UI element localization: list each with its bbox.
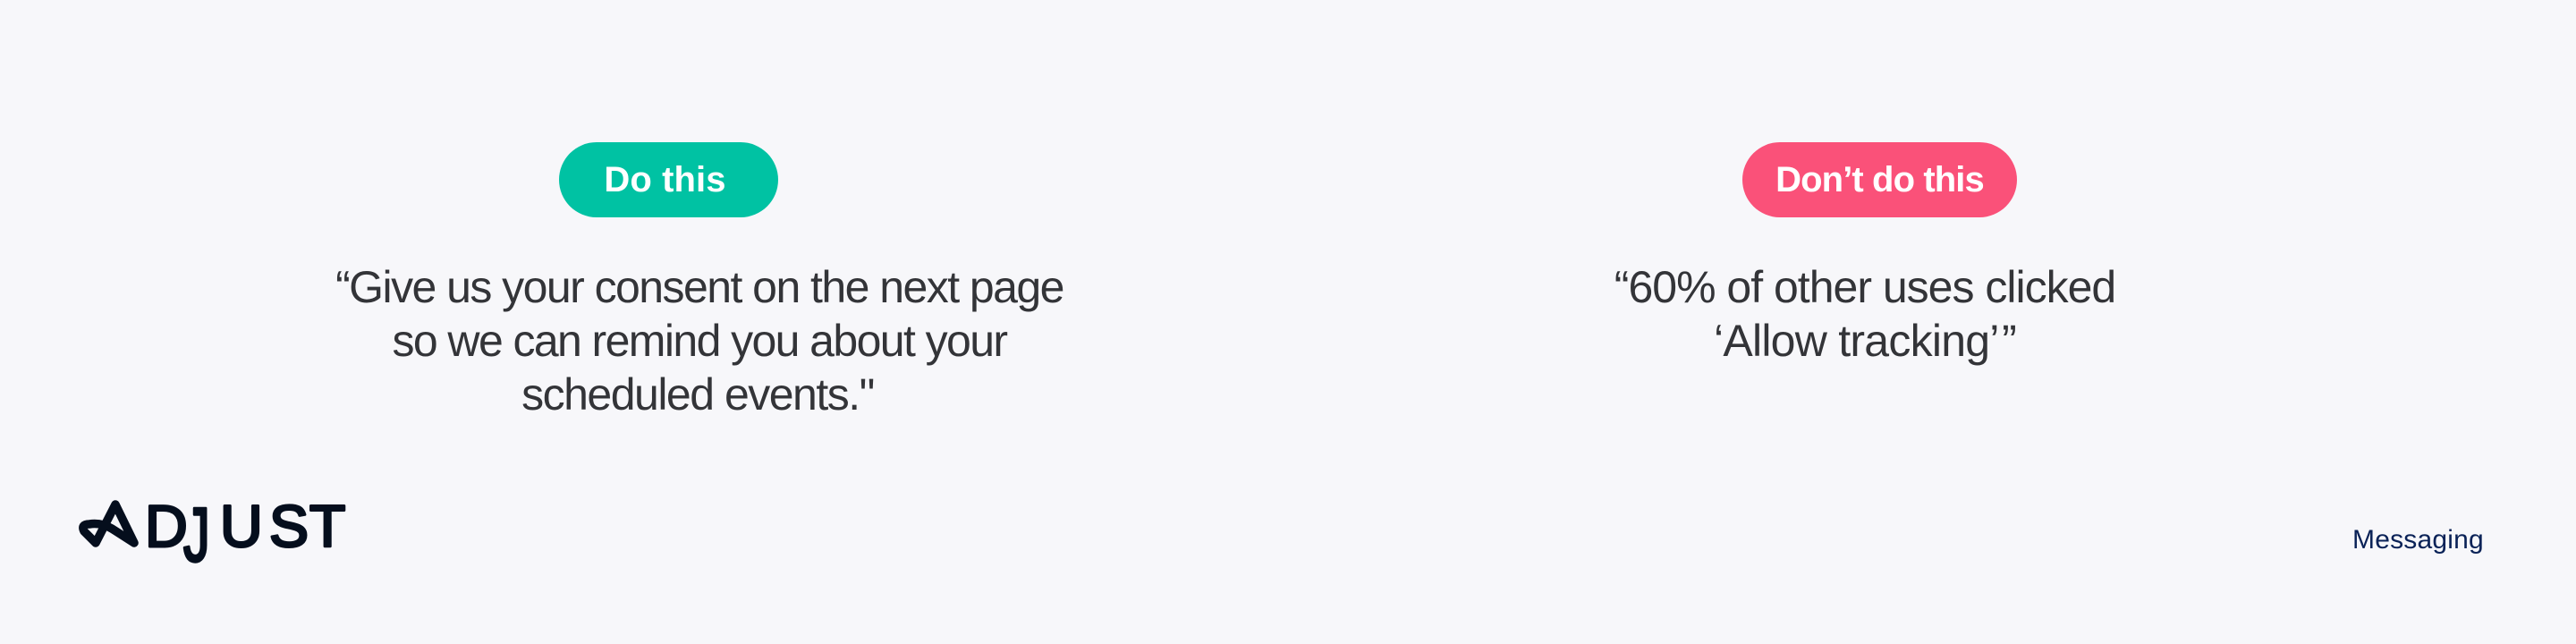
badge: don't do this	[1742, 142, 2017, 217]
badge: do this: Do this	[604, 160, 726, 199]
quote: recommended message: so we can remind you about your	[393, 316, 1006, 366]
wordmark letters: T	[309, 493, 345, 559]
wordmark letters: S	[269, 493, 309, 559]
logo: Adjust	[79, 492, 345, 572]
panel: don't do this	[1614, 142, 2115, 366]
quote: recommended message	[335, 262, 1063, 419]
quote: discouraged message	[1614, 262, 2115, 366]
wordmark letters: U	[220, 493, 263, 559]
panel: do this	[335, 142, 1063, 419]
wordmark letters	[145, 491, 345, 578]
quote: discouraged message: “60% of other uses clicked	[1614, 262, 2115, 312]
badge: do this	[559, 142, 778, 217]
icon: Adjust A mark	[83, 504, 134, 543]
quote: recommended message: scheduled events."	[521, 369, 874, 419]
quote: discouraged message: ‘Allow tracking’ ”	[1714, 316, 2016, 366]
quote: recommended message: “Give us your consent on the next page	[335, 262, 1063, 312]
label: section name: Messaging	[2352, 525, 2484, 555]
wordmark letters: D	[145, 493, 188, 559]
badge: don't do this: Don’t do this	[1775, 160, 1984, 199]
